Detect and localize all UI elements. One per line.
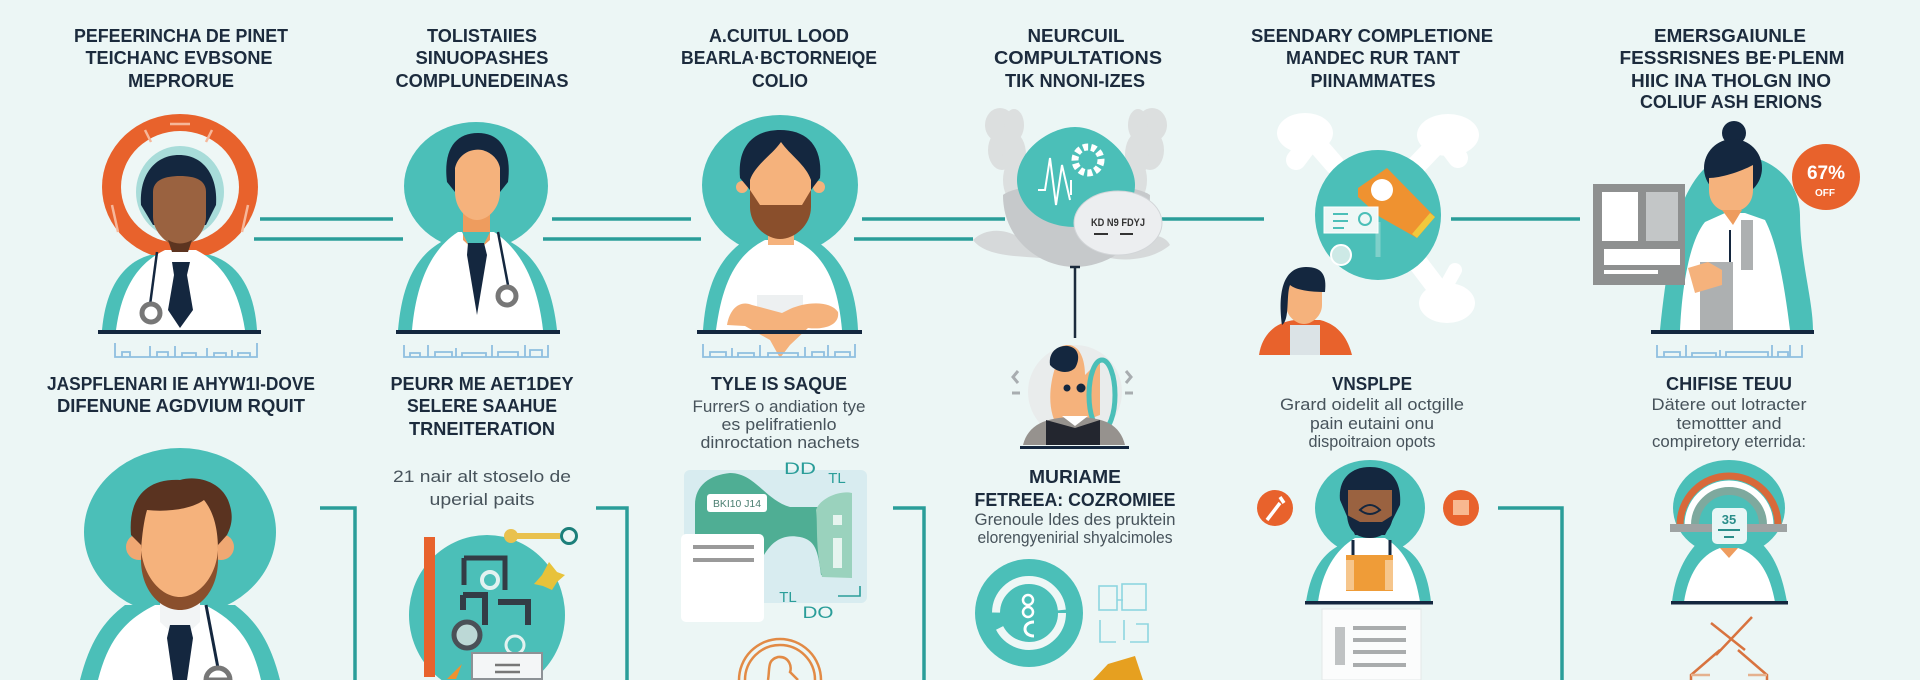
figure: doctor with stethoscope bbox=[396, 122, 560, 334]
heading and text: column 3: FurrerS o andiation tye bbox=[692, 397, 866, 416]
heading and text: column 5: Grard oidelit all octgille bbox=[1280, 395, 1464, 414]
heading: column 3 bbox=[681, 26, 877, 91]
small badge bbox=[1331, 245, 1351, 265]
illustration: green chart panel with card: DO bbox=[802, 603, 834, 622]
heading: second row column 1: DIFENUNE AGDVIUM RQUIT bbox=[57, 396, 305, 416]
heading: column 4: TIK NNONI-IZES bbox=[1005, 71, 1145, 91]
heading and text: column 4: Grenoule ldes des pruktein bbox=[974, 510, 1176, 529]
heading and text: column 4: elorengyenirial shyalcimoles bbox=[978, 528, 1172, 547]
illustration: green chart panel with card: TL bbox=[828, 470, 846, 487]
illustration: green chart panel with card bbox=[681, 459, 867, 622]
icon: orange cross over pentagon bbox=[1691, 617, 1767, 680]
text block: column 2: uperial paits bbox=[430, 490, 534, 509]
heading: column 1: MEPRORUE bbox=[128, 71, 234, 91]
heading and text: column 5: dispoitraion opots bbox=[1308, 432, 1436, 451]
heading and text: column 6: compiretory eterrida: bbox=[1652, 432, 1806, 451]
heading: column 2: SINUOPASHES bbox=[416, 48, 548, 68]
icon: orange folder bbox=[1093, 656, 1143, 680]
illustration: green chart panel with card: TL bbox=[779, 589, 797, 606]
heading and text: column 6: Dätere out lotracter bbox=[1652, 395, 1807, 414]
heading: second row column 2: PEURR ME AET1DEY bbox=[390, 374, 574, 394]
heading: column 5: SEENDARY COMPLETIONE bbox=[1251, 26, 1493, 46]
heading: column 5: MANDEC RUR TANT bbox=[1286, 48, 1460, 68]
icon: orange concentric ring bbox=[739, 639, 821, 680]
heading: second row column 2: TRNEITERATION bbox=[409, 419, 555, 439]
heading: second row column 2 bbox=[390, 374, 574, 439]
heading and text: column 4: FETREEA: COZROMIEE bbox=[974, 490, 1176, 510]
heading: column 6 bbox=[1620, 26, 1844, 112]
figure: woman in orange bbox=[1259, 267, 1352, 355]
heading and text: column 6 bbox=[1652, 374, 1807, 451]
heading and text: column 6: temottter and bbox=[1676, 414, 1782, 433]
icon: orange document badge bbox=[1443, 490, 1479, 526]
heading: column 5: PIINAMMATES bbox=[1310, 71, 1436, 91]
heading: column 4: COMPULTATIONS bbox=[994, 48, 1162, 68]
heading: column 1: PEFEERINCHA DE PINET bbox=[74, 26, 288, 46]
heading and text: column 4 bbox=[974, 467, 1176, 547]
heading and text: column 5: VNSPLPE bbox=[1332, 374, 1412, 394]
heading and text: column 3 bbox=[692, 374, 866, 452]
figure: large bearded doctor bbox=[80, 448, 280, 680]
badge: 67% off: OFF bbox=[1815, 188, 1835, 199]
readout: 35 bbox=[1722, 512, 1736, 527]
heading: column 4: NEURCUIL bbox=[1028, 26, 1125, 46]
heading: column 6: FESSRISNES BE·PLENM bbox=[1620, 48, 1844, 68]
icon: blue line diagram bbox=[1099, 584, 1148, 642]
chart strip: ticks under doctor 1 bbox=[115, 343, 257, 357]
figure: bearded man in white shirt bbox=[697, 115, 862, 358]
badge: 67% off: 67% bbox=[1807, 163, 1845, 184]
text block: column 2: 21 nair alt stoselo de bbox=[393, 467, 571, 486]
figure: woman doctor with monitor bbox=[1593, 121, 1814, 334]
hub: secondary completion emblem with hands bbox=[1277, 113, 1479, 323]
hub: neural computation emblem bbox=[973, 108, 1170, 338]
heading and text: column 4: MURIAME bbox=[1029, 467, 1121, 487]
figure: man holding book bbox=[1305, 460, 1433, 604]
heading and text: column 3: es pelifratienlo bbox=[722, 415, 836, 434]
icon: orange wrench badge bbox=[1257, 490, 1293, 526]
heading: column 2 bbox=[396, 26, 568, 91]
figure: person with hand on head bbox=[1012, 345, 1133, 449]
label inside emblem: KD N9 FDYJ bbox=[1091, 217, 1145, 229]
card label: BKI10 J14 bbox=[713, 499, 761, 510]
heading: column 1: TEICHANC EVBSONE bbox=[86, 48, 272, 68]
chart strip: ticks under man bbox=[703, 344, 855, 357]
heading: second row column 1 bbox=[47, 374, 315, 416]
heading: column 2: COMPLUNEDEINAS bbox=[396, 71, 568, 91]
heading: column 6: HIIC INA THOLGN INO bbox=[1631, 71, 1831, 91]
heading: column 1 bbox=[74, 26, 288, 91]
heading and text: column 3: dinroctation nachets bbox=[700, 433, 860, 452]
icon: teal circle with ring bbox=[975, 559, 1083, 667]
heading and text: column 5 bbox=[1280, 374, 1464, 451]
heading: column 3: A.CUITUL LOOD bbox=[709, 26, 849, 46]
heading: column 3: COLIO bbox=[752, 71, 808, 91]
heading: column 6: COLIUF ASH ERIONS bbox=[1640, 92, 1822, 112]
document card bbox=[1322, 609, 1421, 680]
heading and text: column 6: CHIFISE TEUU bbox=[1666, 374, 1792, 394]
badge: 67% off bbox=[1792, 144, 1860, 210]
illustration: key and tools bbox=[409, 528, 576, 680]
figure: person with rainbow headpiece bbox=[1670, 460, 1788, 604]
heading and text: column 5: pain eutaini onu bbox=[1310, 414, 1434, 433]
heading: column 2: TOLISTAIIES bbox=[427, 26, 537, 46]
heading: column 5 bbox=[1251, 26, 1493, 91]
heading: second row column 2: SELERE SAAHUE bbox=[407, 396, 557, 416]
illustration: green chart panel with card: DD bbox=[784, 459, 816, 478]
heading: column 6: EMERSGAIUNLE bbox=[1654, 26, 1806, 46]
heading: column 3: BEARLA·BCTORNEIQE bbox=[681, 48, 877, 68]
connector lines: top row bbox=[254, 219, 1580, 239]
heading and text: column 3: TYLE IS SAQUE bbox=[711, 374, 847, 394]
figure: doctor with orange ring bbox=[98, 114, 261, 334]
text block: column 2 bbox=[393, 467, 571, 509]
chart strip: ticks under woman doctor bbox=[1657, 345, 1802, 357]
heading: second row column 1: JASPFLENARI IE AHYW1I-DOVE bbox=[47, 374, 315, 394]
connector brackets: second row bbox=[320, 508, 1562, 680]
heading: column 4 bbox=[994, 26, 1162, 91]
chart strip: ticks under doctor 2 bbox=[404, 345, 548, 357]
